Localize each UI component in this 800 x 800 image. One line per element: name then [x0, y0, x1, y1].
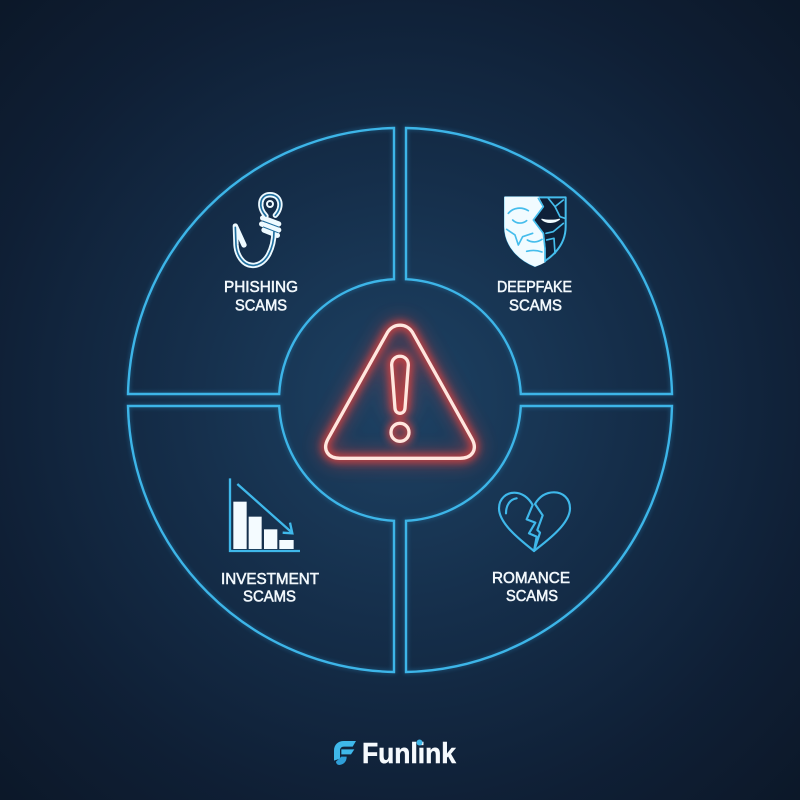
label: investment scams: SCAMS	[243, 588, 296, 606]
logo: funlink: Funlink	[362, 738, 457, 770]
icon: fishing hook	[235, 195, 280, 265]
label: deepfake scams: SCAMS	[509, 298, 562, 315]
logo icon	[334, 741, 356, 765]
icon: deepfake mask shield	[505, 197, 566, 266]
label: romance scams: SCAMS	[506, 588, 558, 605]
icon: broken heart	[499, 492, 570, 551]
label: phishing scams	[224, 279, 298, 315]
label: investment scams	[221, 571, 320, 606]
label: deepfake scams	[497, 279, 572, 315]
label: romance scams	[492, 570, 570, 605]
label: investment scams: INVESTMENT	[221, 571, 320, 588]
segmented circle diagram	[128, 128, 672, 672]
icon: falling bar chart	[230, 478, 300, 551]
label: phishing scams: SCAMS	[235, 298, 287, 315]
icon: warning triangle	[326, 325, 474, 458]
label: romance scams: ROMANCE	[492, 570, 570, 587]
label: deepfake scams: DEEPFAKE	[497, 279, 572, 296]
label: phishing scams: PHISHING	[224, 279, 298, 296]
